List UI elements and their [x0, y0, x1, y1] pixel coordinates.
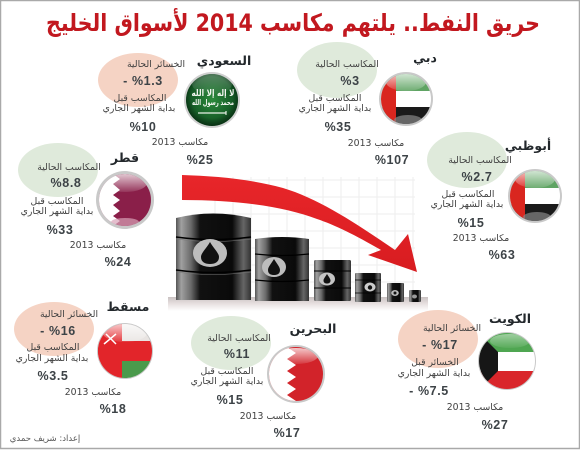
- current losses: [123, 59, 185, 88]
- floor reflection: [168, 297, 428, 311]
- current gains: [315, 59, 379, 88]
- before month: [191, 366, 263, 407]
- icon: UAE flag: [508, 169, 562, 223]
- before month: المكاسب قبل: [27, 342, 79, 353]
- icon: Oman flag: [97, 323, 153, 379]
- current losses: الخسائر الحالية: [127, 59, 185, 70]
- 2013 gains: [348, 138, 409, 167]
- 2013 gains: مكاسب 2013: [348, 138, 404, 149]
- 2013 gains: %25: [187, 153, 213, 167]
- before month: %15: [458, 216, 484, 230]
- before month: بداية الشهر الجاري: [21, 206, 93, 217]
- current gains: المكاسب الحالية: [448, 155, 512, 166]
- 2013 gains: [152, 137, 213, 167]
- before month: [103, 93, 175, 134]
- icon: Saudi flag: [184, 72, 240, 128]
- 2013 gains: %24: [105, 255, 131, 269]
- before month: - %7.5: [409, 384, 449, 398]
- icon: Bahrain flag: [267, 345, 325, 403]
- before month: %35: [325, 120, 351, 134]
- change bubble: [18, 143, 98, 197]
- before month: المكاسب قبل: [31, 196, 83, 207]
- current gains: [448, 155, 512, 184]
- 2013 gains: [240, 411, 300, 440]
- change bubble: [191, 316, 271, 370]
- 2013 gains: مكاسب 2013: [65, 387, 121, 398]
- current gains: %11: [224, 347, 250, 361]
- icon: UAE flag: [379, 72, 433, 126]
- country name: البحرين: [290, 321, 336, 336]
- before month: [431, 189, 503, 230]
- current losses: [422, 323, 481, 352]
- panel: Qatar: [18, 143, 154, 269]
- 2013 gains: %27: [482, 418, 508, 432]
- panel: Abu Dhabi: [427, 132, 562, 262]
- before month: %3.5: [38, 369, 68, 383]
- country name: دبي: [413, 50, 437, 65]
- before month: [299, 93, 371, 134]
- barrel 1: [176, 214, 251, 300]
- current gains: [207, 333, 271, 361]
- current gains: المكاسب الحالية: [37, 162, 101, 173]
- barrel 2: [255, 237, 309, 301]
- before month: %33: [47, 223, 73, 237]
- change bubble: [98, 53, 178, 107]
- icon: Qatar flag: [96, 171, 154, 229]
- panel: Dubai: [297, 42, 437, 167]
- 2013 gains: مكاسب 2013: [152, 137, 208, 148]
- current losses: - %16: [40, 324, 76, 338]
- current gains: %8.8: [51, 176, 81, 190]
- 2013 gains: %63: [489, 248, 515, 262]
- chart grid: [200, 177, 415, 298]
- arrow: falling prices: [182, 175, 417, 272]
- before month: [398, 357, 470, 398]
- country name: أبوظبي: [505, 137, 551, 153]
- before month: بداية الشهر الجاري: [16, 353, 88, 364]
- barrel 5: [387, 283, 404, 302]
- 2013 gains: مكاسب 2013: [240, 411, 296, 422]
- barrel 6: [409, 290, 421, 302]
- barrel 3: [314, 260, 351, 301]
- panel: Bahrain: [191, 316, 336, 440]
- current losses: - %1.3: [123, 74, 163, 88]
- 2013 gains: [70, 240, 131, 269]
- before month: بداية الشهر الجاري: [103, 103, 175, 114]
- 2013 gains: %107: [375, 153, 409, 167]
- 2013 gains: [453, 233, 515, 262]
- 2013 gains: [65, 387, 126, 416]
- current losses: الخسائر الحالية: [423, 323, 481, 334]
- central chart: barrels and falling arrow: [168, 175, 428, 311]
- before month: المكاسب قبل: [114, 93, 166, 104]
- change bubble: [398, 310, 478, 368]
- title: حريق النفط.. يلتهم مكاسب 2014 لأسواق الخليج: [46, 8, 540, 37]
- country name: قطر: [110, 150, 139, 165]
- icon: Kuwait flag: [478, 332, 536, 390]
- before month: %15: [217, 393, 243, 407]
- country name: الكويت: [489, 311, 531, 326]
- before month: بداية الشهر الجاري: [431, 199, 503, 210]
- before month: %10: [130, 120, 156, 134]
- current losses: الخسائر الحالية: [40, 309, 98, 320]
- current losses: [40, 309, 98, 338]
- 2013 gains: %17: [274, 426, 300, 440]
- before month: [21, 196, 93, 237]
- current gains: %2.7: [462, 170, 492, 184]
- change bubble: [427, 132, 507, 188]
- current gains: %3: [340, 74, 360, 88]
- change bubble: [14, 302, 94, 356]
- country name: السعودي: [197, 53, 251, 68]
- panel: Muscat: [14, 299, 153, 416]
- country name: مسقط: [107, 299, 149, 314]
- before month: المكاسب قبل: [201, 366, 253, 377]
- current gains: المكاسب الحالية: [315, 59, 379, 70]
- before month: المكاسب قبل: [442, 189, 494, 200]
- before month: بداية الشهر الجاري: [398, 368, 470, 379]
- 2013 gains: %18: [100, 402, 126, 416]
- icon: Saudi flag: لا إله إلا الله: [192, 89, 234, 99]
- 2013 gains: مكاسب 2013: [70, 240, 126, 251]
- 2013 gains: مكاسب 2013: [447, 402, 503, 413]
- before month: بداية الشهر الجاري: [299, 103, 371, 114]
- change bubble: [297, 42, 377, 98]
- current gains: [37, 162, 101, 190]
- credit: إعداد: شريف حمدي: [10, 434, 80, 444]
- panel: Saudi Arabia: [98, 53, 251, 167]
- before month: الخسائر قبل: [411, 357, 459, 368]
- current losses: - %17: [422, 338, 458, 352]
- before month: بداية الشهر الجاري: [191, 376, 263, 387]
- 2013 gains: مكاسب 2013: [453, 233, 509, 244]
- icon: Saudi flag: محمد رسول الله: [192, 98, 234, 107]
- panel: Kuwait: [398, 310, 536, 432]
- barrel 4: [355, 273, 381, 302]
- before month: المكاسب قبل: [309, 93, 361, 104]
- 2013 gains: [447, 402, 508, 432]
- before month: [16, 342, 88, 383]
- current gains: المكاسب الحالية: [207, 333, 271, 344]
